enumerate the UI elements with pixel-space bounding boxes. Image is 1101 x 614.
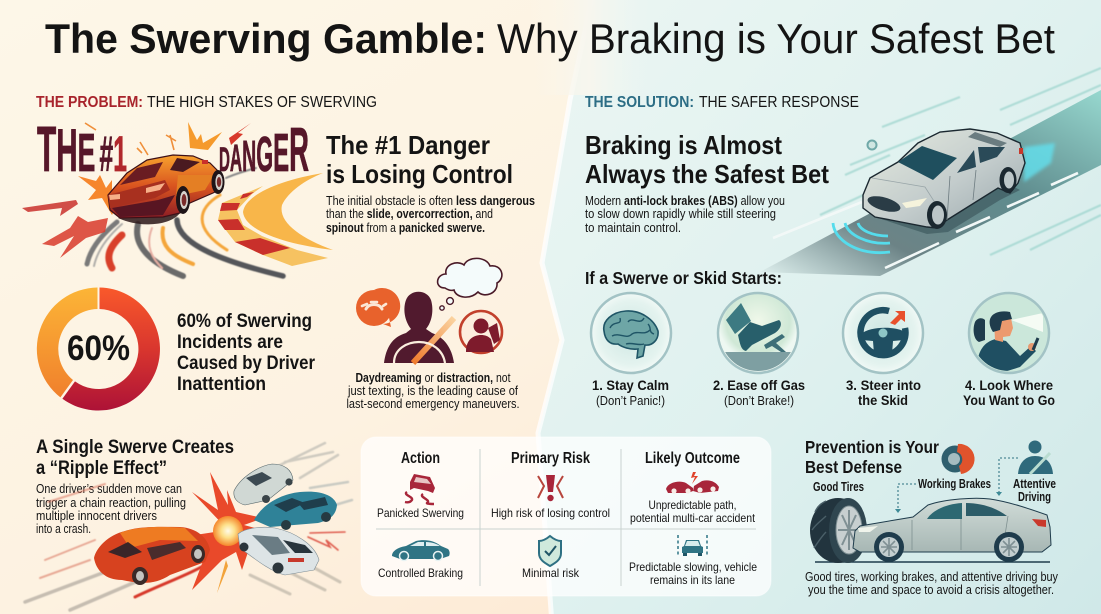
text block: daydreaming: just texting, is the leading cause of — [347, 384, 518, 398]
icon: controlled braking car — [392, 540, 450, 560]
car teal middle — [254, 492, 337, 530]
step 1: stay calm: (Don’t Panic!) — [596, 394, 665, 408]
label: good tires: Good Tires — [813, 480, 864, 494]
text block: number one danger — [326, 130, 535, 235]
row two text: Minimal risk — [522, 566, 580, 580]
table headers: Action — [401, 450, 440, 467]
donut chart: 60 percent — [37, 288, 160, 410]
text block: prevention body: you the time and space to avoid a crisis altogether. — [808, 583, 1054, 597]
title: The Swerving Gamble: — [45, 15, 487, 62]
orange and red skid marks — [162, 228, 193, 264]
section header: the solution: THE SOLUTION: — [585, 94, 694, 111]
step 3: steer into the skid: the Skid — [858, 392, 908, 408]
impact sparks — [78, 175, 124, 215]
text block: daydreaming: last-second emergency maneuvers. — [346, 397, 520, 411]
row one text — [377, 498, 756, 525]
illustration: car with good tires — [810, 498, 1051, 563]
donut chart: 60 percent: 60% — [67, 329, 130, 368]
distraction phone circle — [460, 311, 502, 353]
silver car — [863, 129, 1025, 234]
text block: ripple effect: A Single Swerve Creates — [36, 437, 234, 458]
table headers: Likely Outcome — [645, 450, 740, 467]
text block: braking heading and body: Always the Safest Bet — [585, 159, 829, 189]
speech bubble — [374, 288, 400, 327]
striped curb — [218, 186, 328, 266]
stat text: 60 percent of swerving incidents: 60% of Swerving — [177, 311, 312, 332]
road swoosh — [243, 173, 333, 250]
label: attentive driving — [1013, 477, 1056, 504]
arrow: dotted to roof — [996, 458, 1018, 496]
icon: brake disc — [942, 444, 975, 474]
icon: distracted driver with thought cloud — [356, 258, 502, 363]
road lane lines — [773, 173, 1078, 268]
icon: brain — [604, 311, 658, 358]
text block: ripple effect: trigger a chain reaction, pulling — [36, 496, 186, 510]
heading: if a swerve or skid starts: If a Swerve or Skid Starts: — [585, 268, 782, 288]
row two text: Controlled Braking — [378, 566, 463, 580]
icon: collision — [666, 472, 719, 494]
icon: panicked swerving — [405, 474, 435, 504]
section header: the solution — [585, 94, 859, 111]
table headers — [401, 450, 740, 467]
step 4: look where you want to go — [963, 293, 1055, 408]
car silver top — [234, 464, 293, 505]
clock badge — [868, 140, 876, 150]
side view car — [853, 498, 1051, 562]
brake glow — [1024, 143, 1055, 182]
text block: number one danger: is Losing Control — [326, 159, 513, 189]
section header: the solution: THE SAFER RESPONSE — [699, 94, 859, 111]
background: solution side — [538, 0, 1101, 614]
car orange front — [94, 527, 210, 585]
heading: prevention: Best Defense — [805, 457, 902, 477]
comparison table panel — [361, 437, 771, 596]
text block: daydreaming: Daydreaming or distraction, not — [356, 371, 511, 385]
section header: the problem — [36, 94, 377, 111]
text block: prevention body — [805, 570, 1059, 597]
illustration: chain reaction crash — [25, 443, 352, 610]
icon: driver looking ahead — [974, 311, 1043, 375]
row one text: potential multi-car accident — [630, 511, 756, 525]
background: soft fade at top of divider — [530, 0, 650, 95]
icon: warning exclamation — [538, 475, 563, 501]
step 1: stay calm: 1. Stay Calm — [592, 377, 669, 393]
step 2: ease off gas: 2. Ease off Gas — [713, 377, 805, 393]
tyre tracks — [87, 168, 283, 276]
icon: steering wheel — [860, 310, 905, 355]
road and speed streaks — [760, 90, 1101, 276]
step 1: stay calm — [591, 293, 671, 408]
text block: number one danger: The #1 Danger — [326, 130, 490, 160]
row two text: Predictable slowing, vehicle — [629, 560, 757, 574]
text block: braking heading and body: Modern anti-lock brakes (ABS) allow you — [585, 194, 785, 208]
icon: foot on pedal — [725, 303, 791, 371]
thought cloud — [438, 258, 502, 297]
step 4: look where you want to go: You Want to Go — [963, 392, 1055, 408]
big danger text: THE #1 — [37, 113, 127, 185]
text block: number one danger: The initial obstacle is often less dangerous — [326, 194, 535, 208]
illustration: number one danger swerving car: DANGER — [219, 116, 309, 185]
car white bottom — [238, 527, 319, 575]
heading: prevention — [805, 437, 939, 477]
stat text: 60 percent of swerving incidents: Incidents are — [177, 332, 283, 353]
row two text: remains in its lane — [650, 573, 735, 587]
illustration: number one danger swerving car — [22, 113, 333, 276]
label: working brakes: Working Brakes — [918, 477, 991, 491]
stat text: 60 percent of swerving incidents: Inattention — [177, 374, 266, 395]
text block: braking heading and body: to maintain control. — [585, 221, 681, 235]
step 2: ease off gas — [713, 293, 805, 408]
step 3: steer into the skid: 3. Steer into — [846, 377, 921, 393]
text block: ripple effect: One driver’s sudden move can — [36, 482, 182, 496]
text block: braking heading and body: to slow down rapidly while still steering — [585, 207, 776, 221]
text block: ripple effect: a “Ripple Effect” — [36, 458, 167, 479]
text block: number one danger: spinout from a panicked swerve. — [326, 221, 485, 235]
abs arcs — [833, 223, 890, 253]
section header: the problem: THE PROBLEM: — [36, 94, 143, 111]
row one text: Panicked Swerving — [377, 506, 464, 520]
icon: car in lane — [678, 535, 707, 557]
row two text — [378, 560, 757, 587]
stat text: 60 percent of swerving incidents — [177, 311, 316, 395]
text block: prevention body: Good tires, working brakes, and attentive driving buy — [805, 570, 1059, 584]
text block: ripple effect: into a crash. — [36, 522, 91, 536]
text block: number one danger: than the slide, overcorrection, and — [326, 207, 493, 221]
arrow: dotted to hood — [895, 484, 916, 513]
icon: shield — [539, 536, 561, 566]
text block: braking heading and body — [585, 130, 829, 235]
icon: attentive driver — [1018, 440, 1053, 474]
stat text: 60 percent of swerving incidents: Caused by Driver — [177, 353, 316, 374]
title: Why Braking is Your Safest Bet — [497, 15, 1055, 62]
section header: the problem: THE HIGH STAKES OF SWERVING — [147, 94, 377, 111]
text block: ripple effect — [36, 437, 234, 536]
heading: prevention: Prevention is Your — [805, 437, 939, 457]
large tire — [810, 498, 867, 563]
label: attentive driving: Attentive — [1013, 477, 1056, 491]
illustration: silver car braking on road — [760, 68, 1101, 276]
title — [45, 15, 1055, 62]
row one text: Unpredictable path, — [648, 498, 736, 512]
label: attentive driving: Driving — [1018, 490, 1051, 504]
text block: braking heading and body: Braking is Almost — [585, 130, 782, 160]
text block: daydreaming — [346, 371, 520, 411]
driver silhouette — [384, 292, 454, 363]
text block: ripple effect: multiple innocent drivers — [36, 509, 157, 523]
step 2: ease off gas: (Don’t Brake!) — [724, 394, 794, 408]
row one text: High risk of losing control — [491, 506, 610, 520]
ground line — [815, 561, 1050, 563]
explosion burst — [192, 472, 263, 590]
orange car — [108, 155, 224, 224]
speed lines — [25, 443, 352, 610]
table headers: Primary Risk — [511, 450, 590, 467]
step 4: look where you want to go: 4. Look Where — [965, 377, 1053, 393]
step 3: steer into the skid — [843, 293, 923, 408]
